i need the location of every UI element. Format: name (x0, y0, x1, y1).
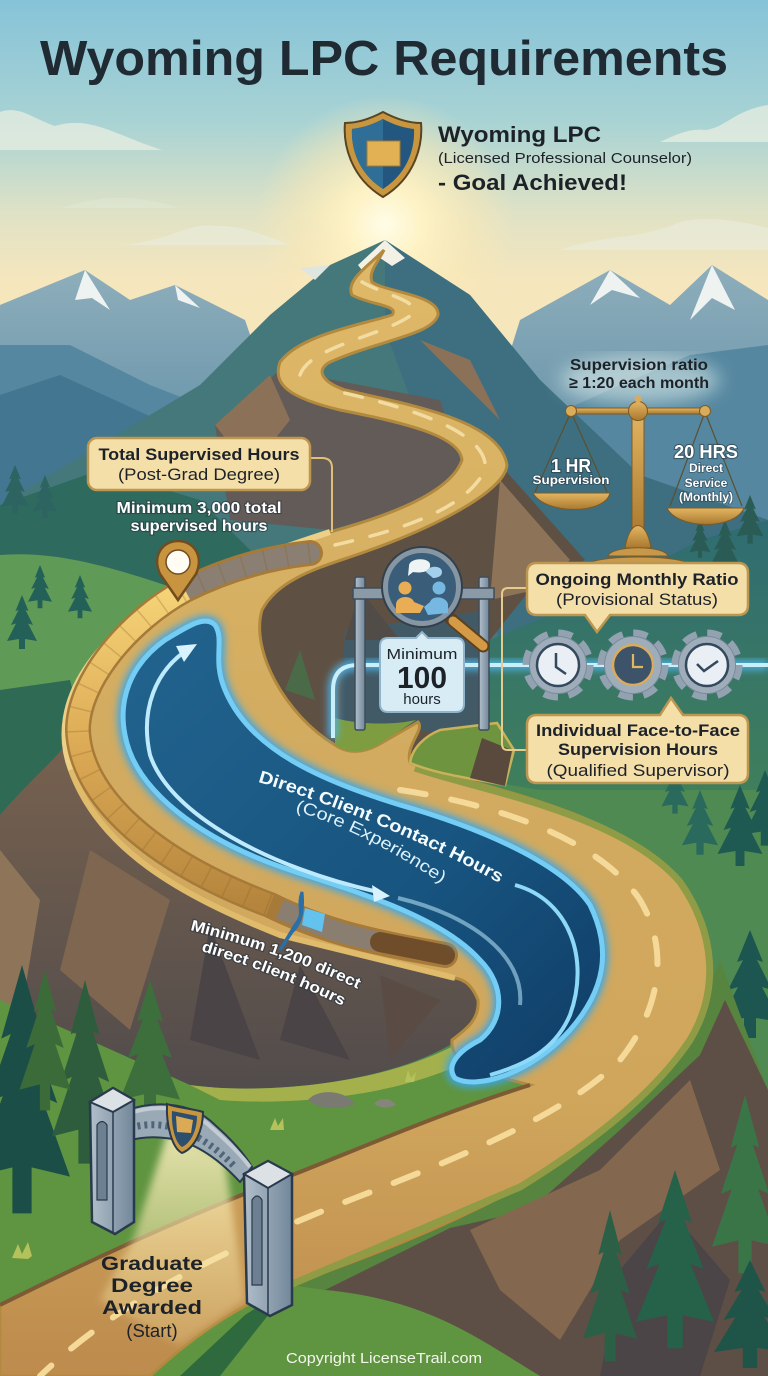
sky background (0, 0, 768, 560)
right pan label: (Monthly) (679, 490, 733, 504)
text: minimum 1,200 line two: direct client hours (201, 941, 346, 1006)
blue direct contact channel (123, 621, 603, 1082)
right pan label: Direct (689, 461, 723, 475)
panel: total supervised hours: (Post-Grad Degree) (118, 466, 280, 484)
light beam under arch (100, 1125, 245, 1345)
text: supervision ratio (560, 356, 720, 404)
far mountains (0, 265, 768, 560)
right pan label (674, 442, 738, 504)
panel: ongoing monthly ratio: (Provisional Status) (556, 591, 718, 609)
left green hills (0, 465, 260, 830)
location pin 3,000 hours (157, 541, 199, 600)
callout: minimum 100 hours: Minimum (386, 646, 458, 663)
panel: individual face-to-face (527, 698, 748, 783)
lower right cliff and meadow (150, 960, 768, 1376)
left pillar (90, 1088, 134, 1234)
text: minimum 3,000: Minimum 3,000 total (116, 500, 282, 517)
text: graduate degree awarded: (Start) (126, 1320, 178, 1341)
text: supervision ratio: Supervision ratio (570, 357, 708, 374)
left pan label (532, 456, 610, 487)
goal text (438, 122, 692, 195)
right pillar (244, 1161, 292, 1316)
lower left meadow (0, 965, 530, 1334)
text: core experience: (Core Experience) (296, 800, 445, 884)
panel: individual face-to-face: Individual Face-to-Face (536, 721, 740, 740)
winding road (0, 250, 710, 1376)
callout: minimum 100 hours: hours (403, 691, 441, 708)
road center dashes (40, 790, 657, 1376)
main mountain (0, 240, 768, 790)
callout: minimum 100 hours (380, 632, 464, 712)
text: minimum 3,000: supervised hours (130, 518, 268, 535)
panel: ongoing monthly ratio: Ongoing Monthly Ratio (536, 570, 738, 589)
left rock cliff (0, 745, 490, 1089)
goal text: (Licensed Professional Counselor) (438, 151, 692, 167)
right pan label: 20 HRS (674, 442, 738, 462)
clouds (0, 105, 768, 250)
goal text: Wyoming LPC (438, 122, 601, 147)
copyright: Copyright LicenseTrail.com (286, 1351, 482, 1367)
milestone marker 1,200 hours (280, 892, 325, 950)
callout: minimum 100 hours: 100 (397, 660, 447, 695)
sun glow (255, 95, 515, 355)
glowing connector line (333, 665, 768, 738)
balance scale (532, 396, 744, 566)
checkpoint gate (353, 547, 494, 730)
panel: total supervised hours (88, 438, 332, 532)
channel flow arrows (147, 648, 578, 1075)
text: supervision ratio: ≥ 1:20 each month (569, 375, 709, 392)
icon: magnifier with people (382, 547, 483, 646)
goal text: - Goal Achieved! (438, 170, 627, 195)
text: minimum 3,000 (116, 500, 282, 535)
icon: arch shield (167, 1104, 203, 1153)
text: minimum 1,200 line one: Minimum 1,200 direct (190, 918, 362, 990)
total hours progress band (78, 553, 445, 955)
right pan label: Service (685, 476, 728, 490)
text: direct client contact hours: Direct Client Contact Hours (259, 770, 502, 882)
gear with check (676, 634, 738, 696)
gear with gold clock (602, 634, 664, 696)
text: graduate degree awarded: Graduate (101, 1253, 203, 1275)
right forested hills (420, 495, 768, 1110)
left pan label: Supervision (532, 473, 610, 487)
panel: total supervised hours: Total Supervised Hours (98, 445, 300, 464)
text: graduate degree awarded (101, 1253, 203, 1341)
panel: individual face-to-face: Supervision Hours (558, 740, 718, 759)
panel: ongoing monthly ratio (527, 563, 748, 632)
bracket connector (502, 588, 527, 750)
base ground (0, 540, 768, 1376)
goal shield icon (345, 112, 421, 197)
text: graduate degree awarded: Degree (111, 1275, 193, 1297)
gear with clock (527, 634, 589, 696)
text: graduate degree awarded: Awarded (102, 1297, 202, 1319)
left pan label: 1 HR (551, 456, 591, 476)
icons: three gears (527, 634, 738, 696)
title: Wyoming LPC Requirements (40, 32, 728, 86)
green patches by gate (335, 718, 514, 786)
panel: individual face-to-face: (Qualified Supervisor) (546, 762, 730, 780)
graduate arch gate (90, 1088, 292, 1316)
